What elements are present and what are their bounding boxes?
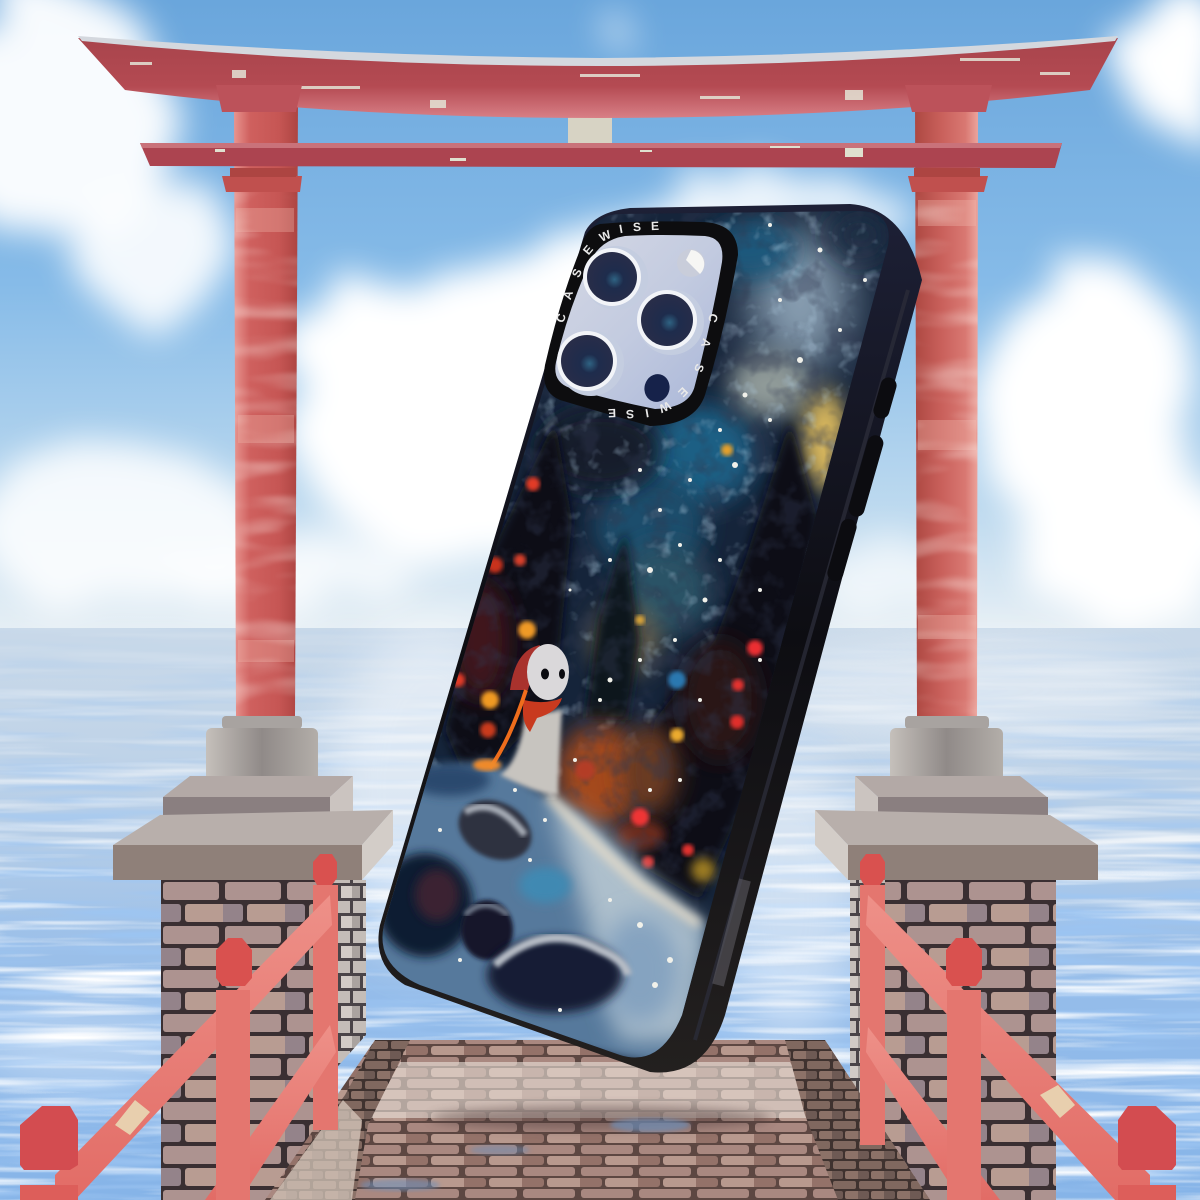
bumper lettering: W: [656, 398, 673, 416]
left pillar: [222, 100, 302, 716]
bumper lettering: I: [644, 406, 650, 420]
bumper lettering: E: [580, 242, 596, 258]
camera module: [544, 219, 738, 426]
camera plate: [555, 235, 722, 409]
right front post: [1118, 1106, 1176, 1200]
left stone base: [113, 716, 393, 880]
camera bumper ring: [544, 221, 738, 426]
snow hill: [370, 760, 705, 1070]
bumper lettering: [553, 219, 721, 421]
bumper lettering: S: [569, 266, 585, 280]
stone walkway: [260, 1040, 940, 1200]
christmas lights: [451, 444, 763, 882]
right railing: [860, 854, 1176, 1200]
boulders: [377, 789, 628, 1013]
right brick column: [850, 880, 1056, 1200]
lower beam: [140, 143, 1062, 168]
sky: [0, 0, 1200, 630]
bumper lettering: W: [597, 227, 614, 245]
bumper lettering: C: [705, 312, 721, 324]
sensor dot: [641, 371, 673, 405]
left front post: [20, 1106, 78, 1200]
bumper lettering: I: [618, 222, 624, 236]
left middle post: [216, 938, 252, 1200]
night sky: [540, 210, 890, 675]
bumper lettering: A: [560, 288, 576, 301]
left railing: [20, 854, 338, 1200]
bumper lettering: E: [651, 219, 659, 233]
falling snow: [438, 223, 867, 1012]
side buttons: [825, 376, 898, 583]
lens: bottom: [557, 330, 624, 396]
right pillar: [908, 100, 988, 716]
left rear post: [313, 854, 338, 1130]
right upper rail: [866, 895, 1150, 1200]
phone case artwork: snowman in snowy forest: [370, 200, 900, 1080]
right middle post: [946, 938, 982, 1200]
left upper rail: [55, 895, 332, 1200]
pillar weathering: [234, 192, 978, 714]
torii gate: [78, 36, 1118, 722]
snowman: [473, 644, 569, 795]
lens: top: [583, 246, 648, 310]
sea: [0, 620, 1200, 1200]
right rear post: [860, 854, 885, 1145]
clouds: [0, 0, 1200, 625]
forest trees: [445, 420, 818, 900]
light paint texture: [430, 212, 885, 800]
flash: [677, 249, 705, 277]
bumper lettering: E: [675, 384, 691, 400]
right stone base: [815, 716, 1098, 880]
bumper lettering: S: [633, 220, 641, 234]
bumper lettering: C: [553, 312, 569, 324]
dark paint texture: [450, 212, 872, 894]
bumper lettering: A: [698, 337, 714, 349]
upper beam: [78, 36, 1118, 118]
bumper lettering: E: [608, 406, 616, 420]
phone case body: [378, 204, 922, 1073]
left brick column: [161, 880, 366, 1200]
center strut: [568, 100, 612, 143]
lens: middle: [637, 289, 704, 355]
left lower rail: [205, 1025, 336, 1200]
right lower rail: [866, 1027, 1000, 1200]
bumper lettering: S: [691, 362, 707, 374]
bumper lettering: S: [626, 407, 634, 421]
